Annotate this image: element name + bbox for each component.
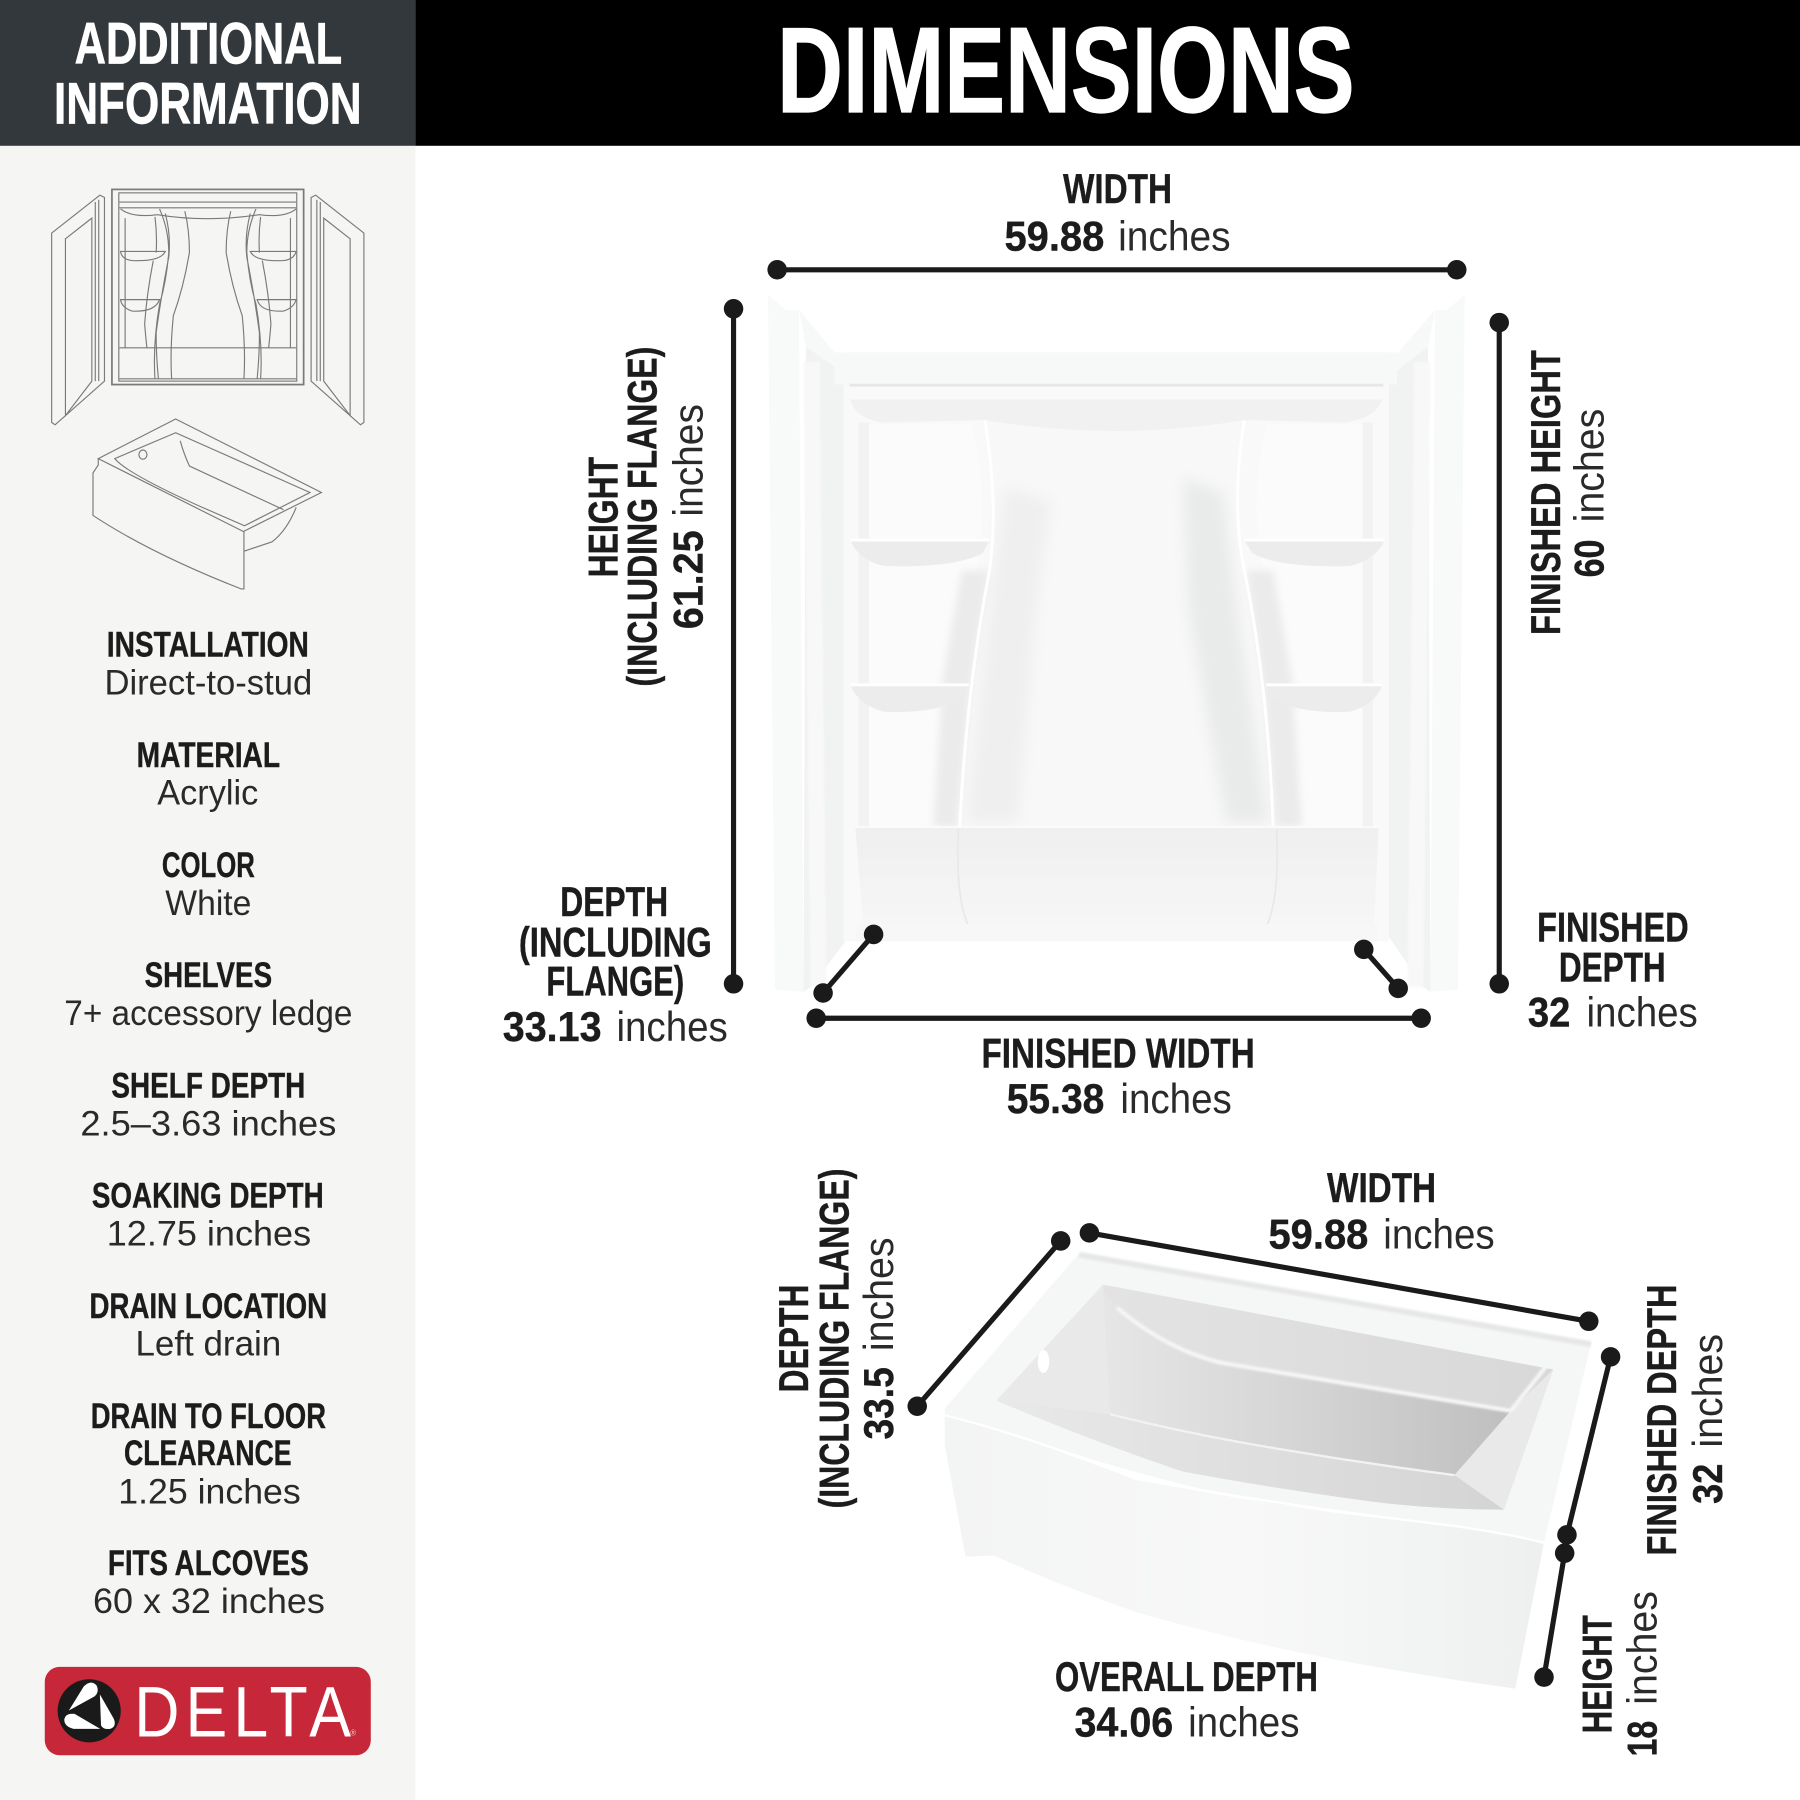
ledge highlight (1117, 1308, 1546, 1411)
icon: bathtub line drawing (93, 419, 321, 589)
spec: soaking depth (92, 1177, 324, 1254)
label: tub width (1268, 1165, 1495, 1257)
center band right shadow (1184, 478, 1268, 822)
spec: drain location: Left drain (135, 1325, 281, 1364)
label: depth including flange: DEPTH (560, 879, 668, 925)
height line (724, 299, 743, 994)
drain hole (1038, 1350, 1049, 1373)
main title banner: DIMENSIONS (777, 2, 1355, 138)
spec: soaking depth: 12.75 inches (107, 1215, 311, 1254)
label: height including flange: HEIGHT (581, 457, 627, 577)
basin back wall below ledge (1103, 1291, 1511, 1475)
sidebar heading (0, 0, 416, 146)
spec: drain to floor clearance (91, 1397, 326, 1511)
label: tub depth including flange: 33.5 (856, 1367, 902, 1440)
label: tub width: 59.88 (1268, 1211, 1368, 1257)
logo: Delta (45, 1667, 371, 1755)
center panel edges (960, 420, 1273, 827)
alcove recesses (869, 425, 982, 827)
spec: color: COLOR (162, 846, 255, 885)
illustration: bathtub (945, 1254, 1591, 1689)
sidebar heading: ADDITIONAL (75, 12, 342, 77)
label: tub depth including flange (771, 1169, 902, 1508)
spec: shelf depth (80, 1066, 336, 1143)
recess shadow right (1247, 571, 1302, 827)
label: finished width (982, 1031, 1255, 1122)
label: width: WIDTH (1063, 166, 1172, 212)
icon: exploded wall panels line drawing (52, 189, 364, 425)
tub depth line (907, 1231, 1070, 1416)
tub height line (1534, 1543, 1574, 1687)
label: tub depth including flange: DEPTH (771, 1285, 817, 1392)
recess shadow left (933, 571, 990, 827)
finished width line (806, 1008, 1431, 1028)
basin left end wall (996, 1285, 1110, 1430)
label: depth including flange: inches (616, 1004, 728, 1050)
dimension lines: tub (907, 1223, 1620, 1687)
spec: shelf depth: SHELF DEPTH (111, 1066, 305, 1105)
label: tub height: HEIGHT (1575, 1615, 1621, 1733)
label: depth including flange: FLANGE) (546, 958, 684, 1004)
spec: drain location (90, 1287, 327, 1364)
spec: drain to floor clearance: DRAIN TO FLOOR (91, 1397, 326, 1436)
label: height including flange: inches (666, 404, 712, 517)
shelf: upper left (851, 541, 990, 566)
label: finished depth (1528, 904, 1698, 1035)
label: width: 59.88 (1004, 213, 1104, 259)
spec: drain to floor clearance: 1.25 inches (118, 1472, 301, 1511)
label: finished depth: FINISHED (1537, 904, 1689, 950)
label: finished height: FINISHED HEIGHT (1523, 350, 1569, 635)
basin front slope (996, 1401, 1504, 1510)
left side wall (804, 347, 855, 992)
top corner wedges (799, 310, 1435, 381)
spec: fits alcoves: 60 x 32 inches (93, 1582, 325, 1621)
label: finished depth: DEPTH (1559, 945, 1666, 991)
logo: Delta: ® (350, 1729, 356, 1738)
label: finished depth: inches (1586, 989, 1698, 1035)
spec: material (137, 736, 280, 813)
label: finished height: inches (1567, 409, 1613, 522)
label: tub finished depth: FINISHED DEPTH (1639, 1285, 1685, 1555)
spec: color: White (165, 884, 251, 923)
left flange (768, 295, 804, 992)
shelf: lower left (851, 685, 969, 712)
label: height including flange (581, 347, 712, 686)
label: tub width: inches (1383, 1211, 1495, 1257)
label: finished height (1523, 350, 1613, 635)
label: finished height: 60 (1567, 540, 1613, 577)
spec: material: Acrylic (157, 774, 258, 813)
shelf top edges (851, 540, 1384, 685)
label: depth including flange (503, 879, 728, 1050)
label: tub height: 18 (1620, 1721, 1666, 1756)
label: width (1004, 166, 1231, 259)
label: finished width: inches (1120, 1076, 1232, 1122)
bottom ledge (855, 827, 1379, 924)
label: tub finished depth (1639, 1285, 1731, 1555)
center band left shadow (967, 488, 1052, 822)
depth tick left (813, 925, 883, 1003)
depth tick right (1354, 940, 1408, 998)
right side wall (1383, 347, 1430, 992)
label: finished width: 55.38 (1007, 1076, 1104, 1122)
label: finished width: FINISHED WIDTH (982, 1031, 1255, 1077)
sidebar heading: INFORMATION (54, 71, 362, 136)
label: tub height: inches (1620, 1591, 1666, 1705)
label: depth including flange: (INCLUDING (519, 919, 712, 965)
spec: installation: Direct-to-stud (104, 664, 312, 703)
label: tub overall depth: inches (1188, 1699, 1299, 1745)
logo: Delta: DELTA (134, 1674, 357, 1753)
apron (945, 1415, 1544, 1689)
dimension lines: shower (724, 260, 1509, 1028)
width line (767, 260, 1467, 280)
label: tub overall depth: 34.06 (1074, 1699, 1173, 1745)
tub finished depth line (1557, 1347, 1620, 1545)
spec: shelves (64, 956, 352, 1033)
spec: shelves: 7+ accessory ledge (64, 994, 352, 1033)
tub width line (1080, 1223, 1599, 1331)
label: tub finished depth: inches (1685, 1334, 1731, 1448)
label: tub depth including flange: inches (856, 1238, 902, 1351)
spec: installation: INSTALLATION (107, 626, 309, 665)
panel: additional information sidebar (0, 0, 416, 1800)
label: depth including flange: 33.13 (503, 1004, 602, 1050)
label: height including flange: (INCLUDING FLANGE) (620, 347, 666, 686)
label: finished depth: 32 (1528, 989, 1570, 1035)
illustration: shower walls (768, 295, 1465, 992)
shelf: upper right (1244, 541, 1384, 566)
top shelf (851, 399, 1382, 431)
alcove strips (859, 422, 1373, 827)
back wall (844, 352, 1389, 941)
top band (835, 352, 1397, 385)
spec: drain to floor clearance: CLEARANCE (124, 1434, 292, 1473)
basin right end wall (1454, 1370, 1553, 1510)
label: tub width: WIDTH (1327, 1165, 1436, 1211)
main title banner (416, 0, 1800, 146)
spec: installation (104, 626, 312, 703)
floor edge highlight (1110, 1414, 1454, 1475)
label: tub overall depth (1055, 1654, 1318, 1745)
spec: color (162, 846, 255, 923)
center panel (960, 420, 1273, 827)
label: width: inches (1118, 213, 1231, 259)
spec: soaking depth: SOAKING DEPTH (92, 1177, 324, 1216)
spec: shelf depth: 2.5–3.63 inches (80, 1104, 336, 1143)
right flange (1430, 295, 1465, 992)
spec: shelves: SHELVES (145, 956, 272, 995)
label: tub depth including flange: (INCLUDING FLANGE) (811, 1169, 857, 1508)
spec: drain location: DRAIN LOCATION (90, 1287, 327, 1326)
spec: material: MATERIAL (137, 736, 280, 775)
label: tub overall depth: OVERALL DEPTH (1055, 1654, 1318, 1700)
spec: fits alcoves: FITS ALCOVES (108, 1544, 309, 1583)
finished height line (1489, 313, 1509, 994)
tub rim (945, 1254, 1591, 1543)
label: height including flange: 61.25 (666, 530, 712, 629)
label: tub height (1575, 1591, 1666, 1756)
shelf: lower right (1266, 685, 1382, 712)
spec: fits alcoves (93, 1544, 325, 1621)
label: tub finished depth: 32 (1685, 1464, 1731, 1504)
basin (996, 1285, 1553, 1510)
